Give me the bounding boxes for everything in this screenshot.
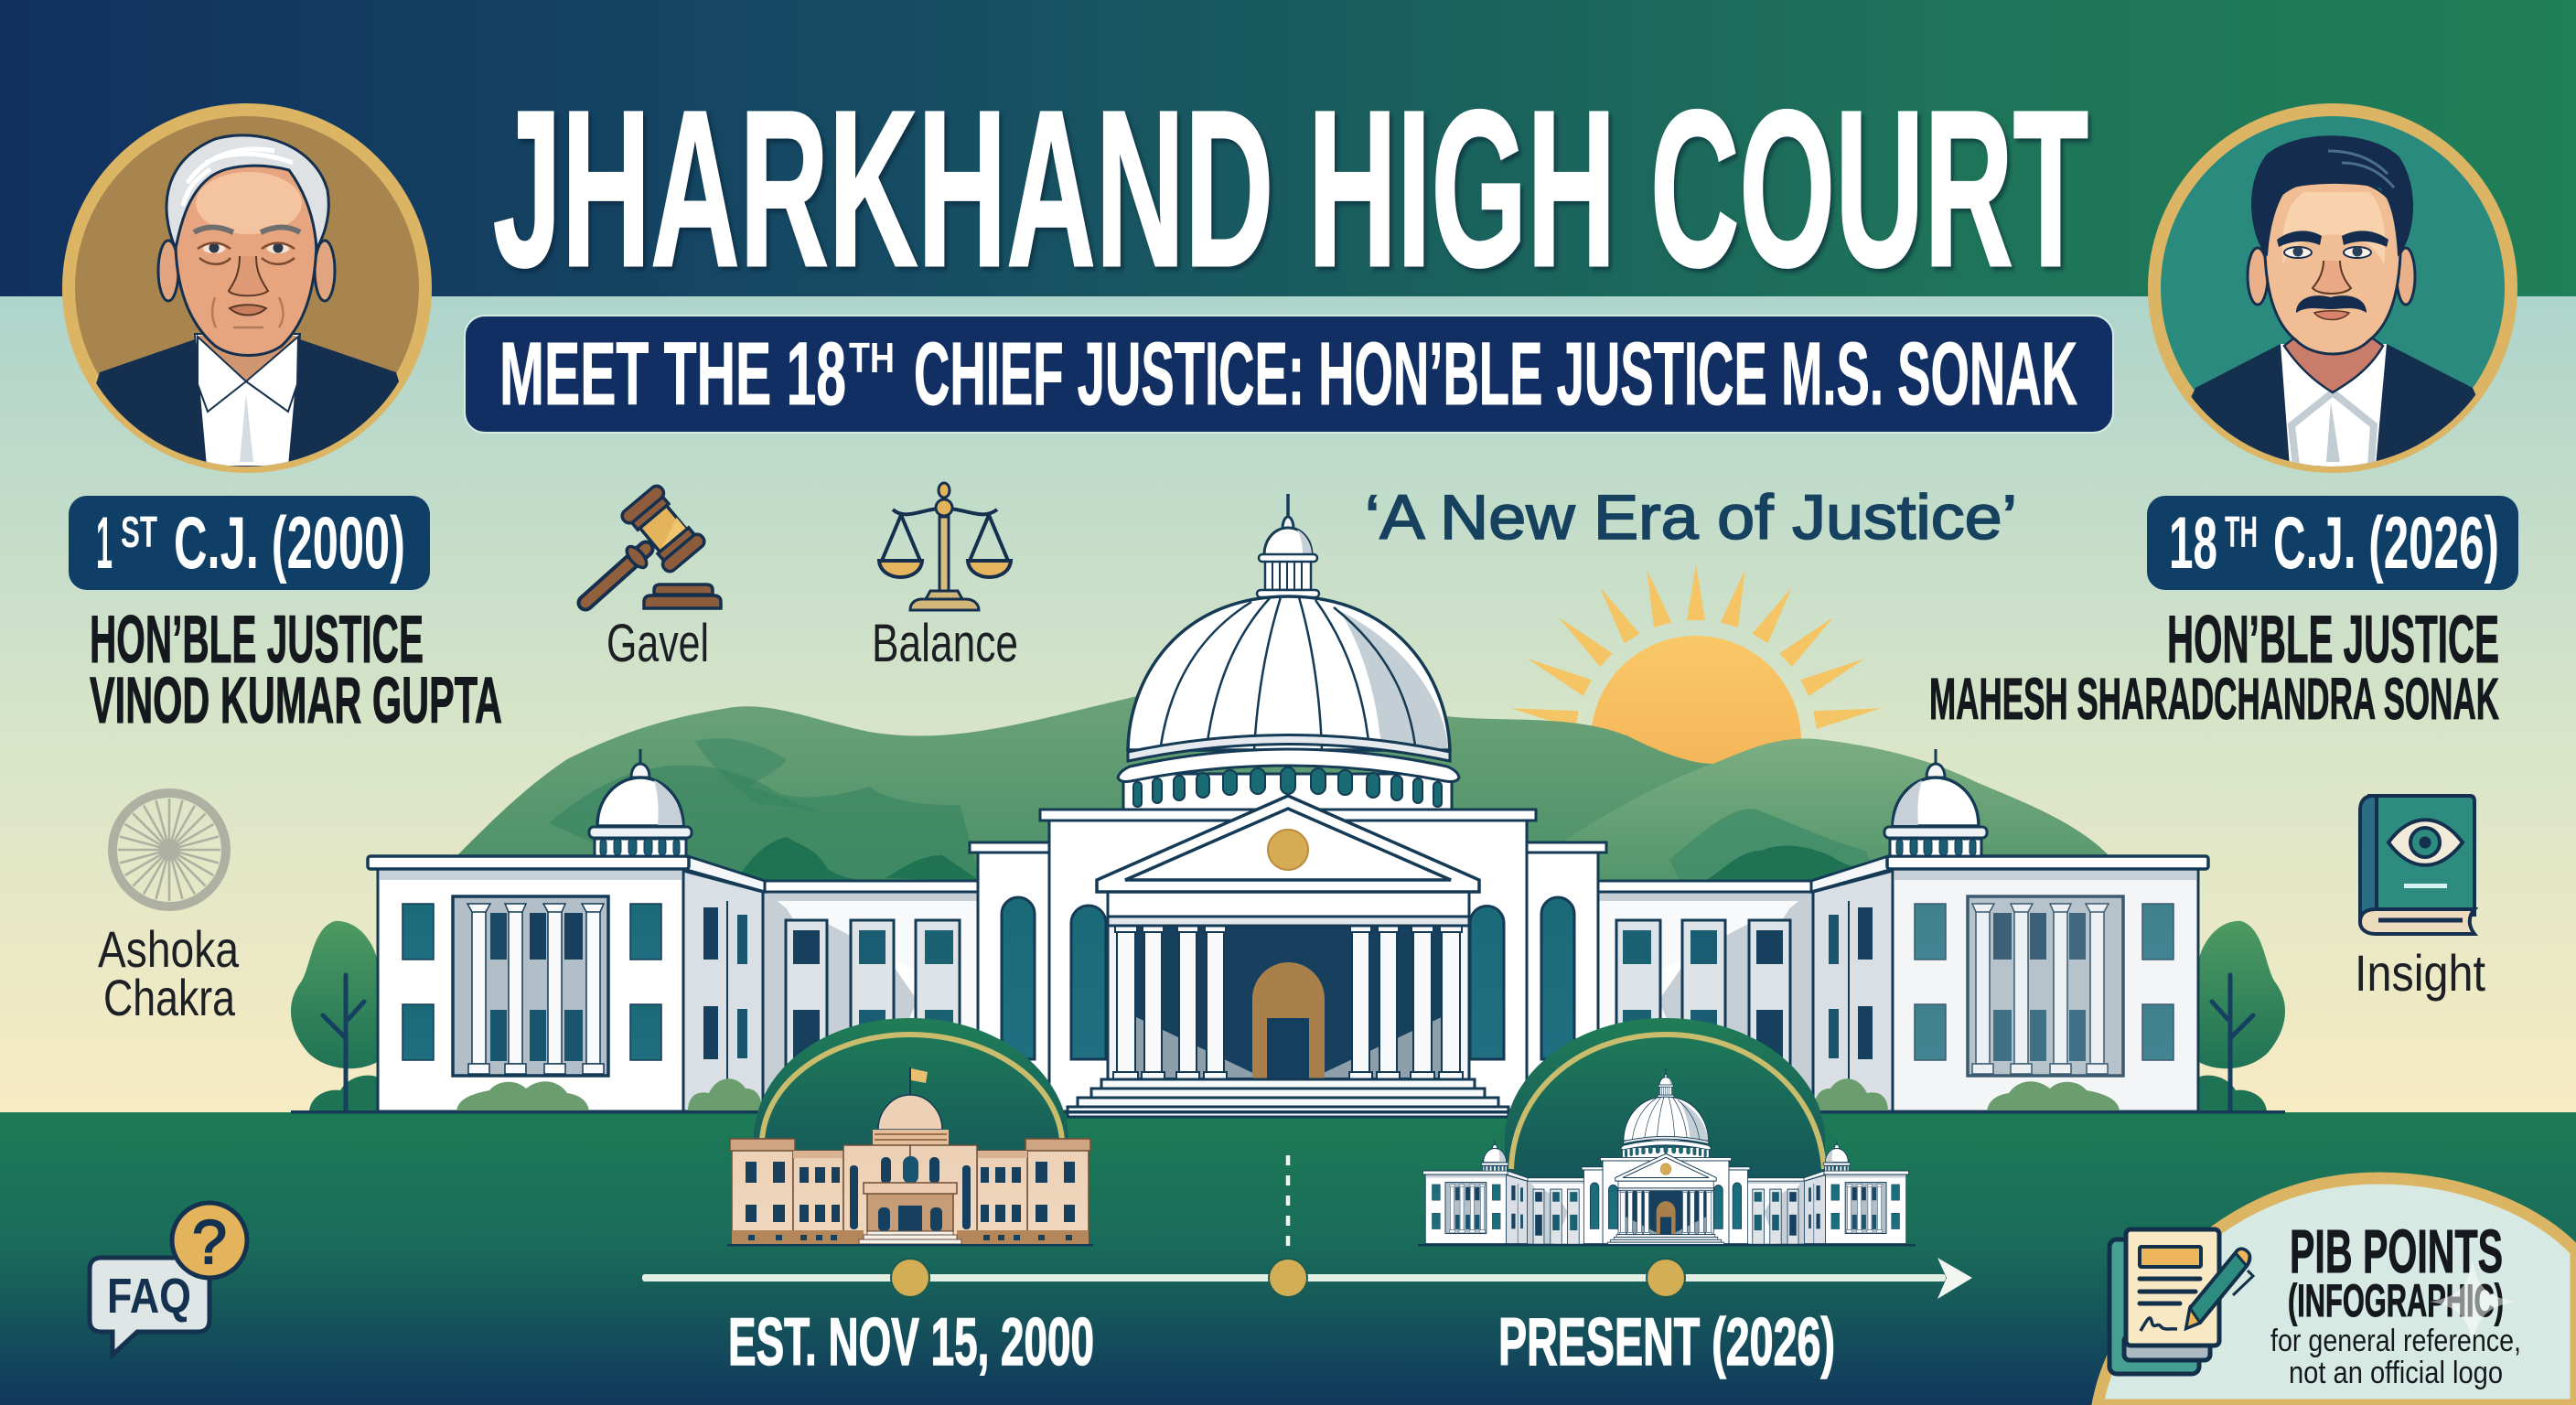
thumbnail ground line [1418, 1244, 1916, 1246]
badge: first chief justice: ST [121, 509, 157, 557]
icon: insight book [2360, 796, 2474, 934]
tree left [291, 921, 379, 1111]
icon: faq bubble: ? [192, 1207, 227, 1277]
label: ashoka chakra [98, 920, 240, 1026]
header band [0, 0, 2576, 296]
icon: faq bubble [90, 1203, 247, 1355]
subtitle banner: MEET THE 18 [499, 324, 846, 424]
ground [0, 1112, 2576, 1405]
name: first chief justice: HON’BLE JUSTICE [90, 603, 424, 677]
present court building thumbnail [1422, 1067, 1909, 1245]
background sky [0, 293, 2576, 1116]
badge: first chief justice [69, 496, 430, 590]
timeline label: present: PRESENT (2026) [1498, 1305, 1835, 1379]
badge: first chief justice: 1 [96, 502, 113, 585]
label: ashoka chakra: Ashoka [98, 920, 240, 978]
icon: gavel [585, 483, 721, 608]
tree right [2197, 921, 2285, 1111]
portrait: eighteenth chief justice [2150, 110, 2516, 485]
timeline [642, 1155, 1972, 1299]
name: first chief justice: VINOD KUMAR GUPTA [90, 665, 502, 737]
subtitle banner [465, 316, 2113, 433]
icon: document with pen [2109, 1229, 2253, 1374]
portrait: first chief justice [64, 110, 430, 485]
main court building [291, 494, 2285, 1117]
label: ashoka chakra: Chakra [103, 969, 236, 1026]
name: first chief justice [90, 603, 502, 737]
badge: eighteenth chief justice: TH [2225, 509, 2258, 557]
badge: first chief justice: C.J. (2000) [174, 502, 405, 585]
sun with rays [1509, 564, 1883, 846]
icon: faq bubble: FAQ [107, 1269, 191, 1324]
tagline: ‘A New Era of Justice’ [1365, 482, 2017, 552]
icon: balance scales [879, 483, 1011, 610]
label: insight: Insight [2355, 944, 2485, 1002]
icon: ashoka chakra [113, 793, 226, 906]
subtitle banner: TH [849, 334, 895, 381]
old court building thumbnail [727, 1067, 1093, 1246]
timeline arch right [1505, 1018, 1825, 1226]
badge: eighteenth chief justice [2147, 496, 2518, 590]
badge: eighteenth chief justice: 18 [2169, 502, 2217, 585]
text: pib points: not an official logo [2289, 1356, 2503, 1390]
timeline arch left [754, 1018, 1068, 1226]
name: eighteenth chief justice [1929, 603, 2499, 732]
hills [457, 696, 2109, 1112]
timeline label: established: EST. NOV 15, 2000 [728, 1305, 1094, 1379]
panel: pib points [2098, 1178, 2576, 1405]
text: pib points: for general reference, [2270, 1324, 2521, 1358]
watermark sparkle [2430, 1260, 2516, 1343]
label: balance: Balance [872, 614, 1018, 673]
text: pib points [2270, 1217, 2521, 1390]
label: gavel: Gavel [606, 614, 709, 673]
